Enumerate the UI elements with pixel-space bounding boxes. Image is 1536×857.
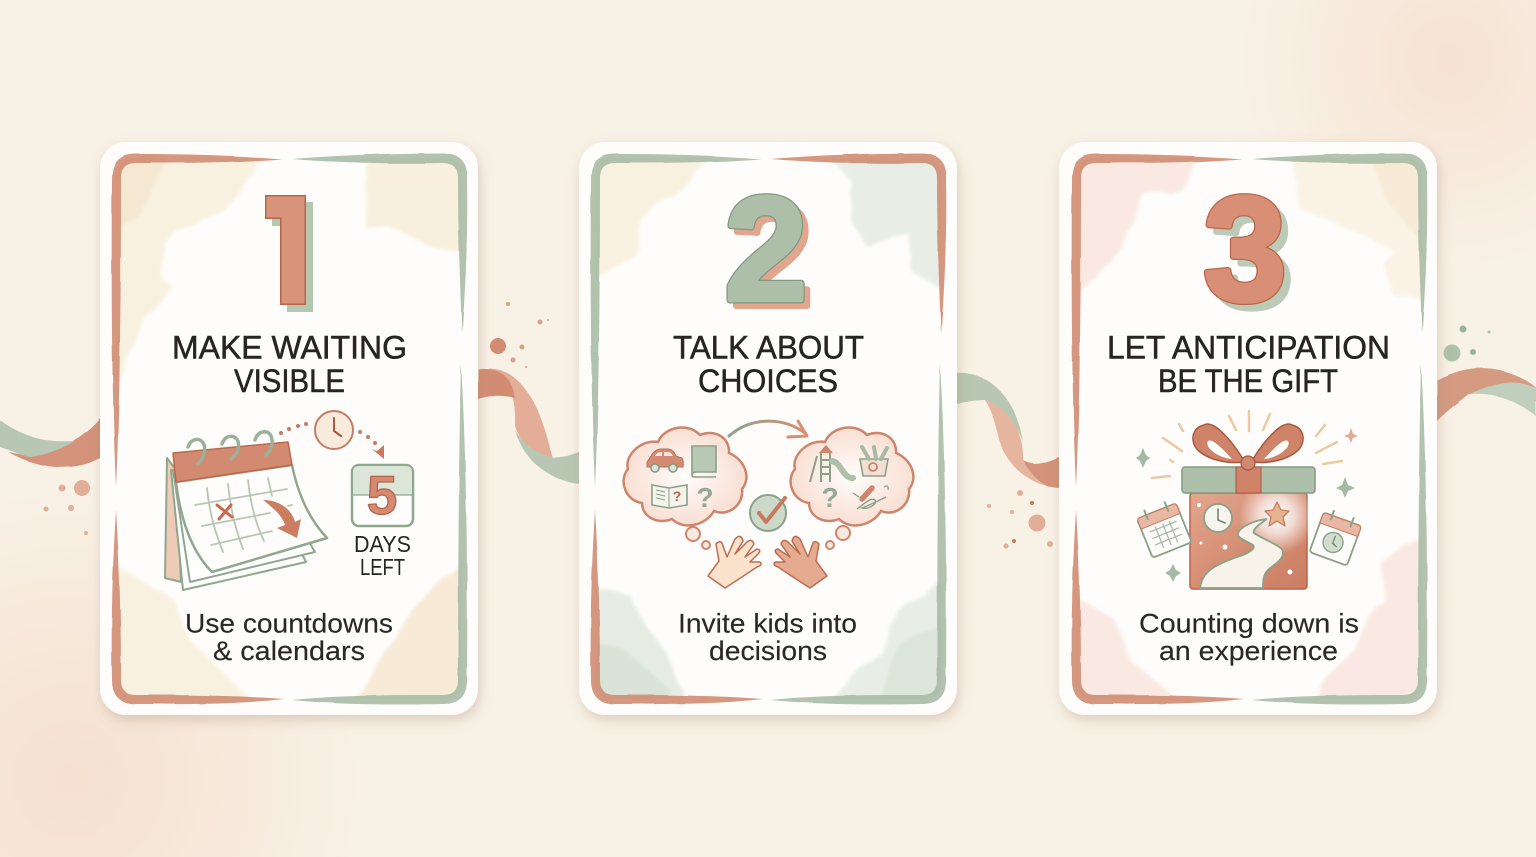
icon: flip calendar xyxy=(165,411,413,590)
panel: card 1 xyxy=(100,142,478,715)
numeral 2: 2 xyxy=(725,167,807,332)
watercolor washes card 3 xyxy=(1080,162,1420,696)
numeral 1: 1 xyxy=(243,167,331,346)
days left xyxy=(354,531,411,580)
small calendar right xyxy=(1309,508,1363,566)
ribbon: between cards 1 and 2 xyxy=(478,368,579,484)
panel: card 3 xyxy=(1059,142,1437,715)
heading card 3: BE THE GIFT xyxy=(1158,363,1338,399)
body card 1: Use countdowns xyxy=(185,608,393,638)
frame card 3 xyxy=(1072,153,1427,705)
countdown box xyxy=(352,464,413,526)
heading card 2: CHOICES xyxy=(698,363,838,399)
body card 2 xyxy=(678,608,857,666)
numeral 2: 2 xyxy=(731,173,813,338)
rays xyxy=(1152,411,1342,478)
body card 2: Invite kids into xyxy=(678,608,857,638)
arrow between clouds xyxy=(729,421,806,436)
ribbon: left edge xyxy=(0,418,100,467)
frame card 1 xyxy=(112,153,467,705)
heading card 1 xyxy=(172,330,407,399)
numeral 2: 2 xyxy=(725,167,807,332)
splatter: centre right xyxy=(987,490,1053,548)
icon: thought clouds and hands xyxy=(624,421,913,588)
bow xyxy=(1193,424,1303,470)
heading card 1: MAKE WAITING xyxy=(172,330,407,366)
body card 1: & calendars xyxy=(213,636,365,666)
heading card 3: LET ANTICIPATION xyxy=(1107,330,1390,366)
icon: gift box xyxy=(1135,411,1363,589)
thought bubbles xyxy=(686,526,850,549)
numeral 1: 1 xyxy=(236,160,324,339)
splatter: right xyxy=(1444,326,1490,362)
heading card 2 xyxy=(673,330,864,399)
clock xyxy=(315,411,353,449)
splatter: left xyxy=(44,480,90,535)
heading card 3 xyxy=(1107,330,1390,399)
body card 3: Counting down is xyxy=(1139,608,1359,638)
box xyxy=(1190,478,1315,589)
body card 3: an experience xyxy=(1159,636,1338,666)
left cloud: ? xyxy=(673,488,681,504)
ribbon: right edge xyxy=(1437,368,1536,422)
right hand xyxy=(774,536,827,588)
numeral 3: 3 xyxy=(1211,174,1293,339)
panel: card 2 xyxy=(579,142,957,715)
heading card 2: TALK ABOUT xyxy=(673,330,864,366)
numeral 3: 3 xyxy=(1204,167,1286,332)
right cloud: ? xyxy=(821,482,839,513)
right cloud xyxy=(791,428,913,525)
numeral 3: 3 xyxy=(1204,167,1286,332)
numeral 1: 1 xyxy=(236,160,324,339)
lid xyxy=(1182,467,1315,493)
dotted path to clock xyxy=(279,422,384,459)
left hand xyxy=(708,536,761,588)
countdown box: 5 xyxy=(367,464,397,526)
ribbon: between cards 2 and 3 xyxy=(957,373,1059,488)
small calendar left xyxy=(1135,499,1192,558)
splatter: centre left xyxy=(490,302,549,368)
watercolor washes card 2 xyxy=(598,162,940,696)
numeral 1 xyxy=(265,195,313,312)
heading card 1: VISIBLE xyxy=(234,363,345,399)
body card 2: decisions xyxy=(709,636,827,666)
watercolor washes card 1 xyxy=(118,161,459,697)
left cloud: ? xyxy=(696,482,714,513)
body card 1 xyxy=(185,608,393,666)
sparkles xyxy=(1136,428,1358,582)
days left: DAYS xyxy=(354,531,411,557)
left cloud xyxy=(624,428,746,525)
check circle xyxy=(750,495,786,531)
frame card 2 xyxy=(591,153,946,705)
body card 3 xyxy=(1139,608,1359,666)
arrow head xyxy=(788,421,807,437)
days left: LEFT xyxy=(360,554,405,580)
